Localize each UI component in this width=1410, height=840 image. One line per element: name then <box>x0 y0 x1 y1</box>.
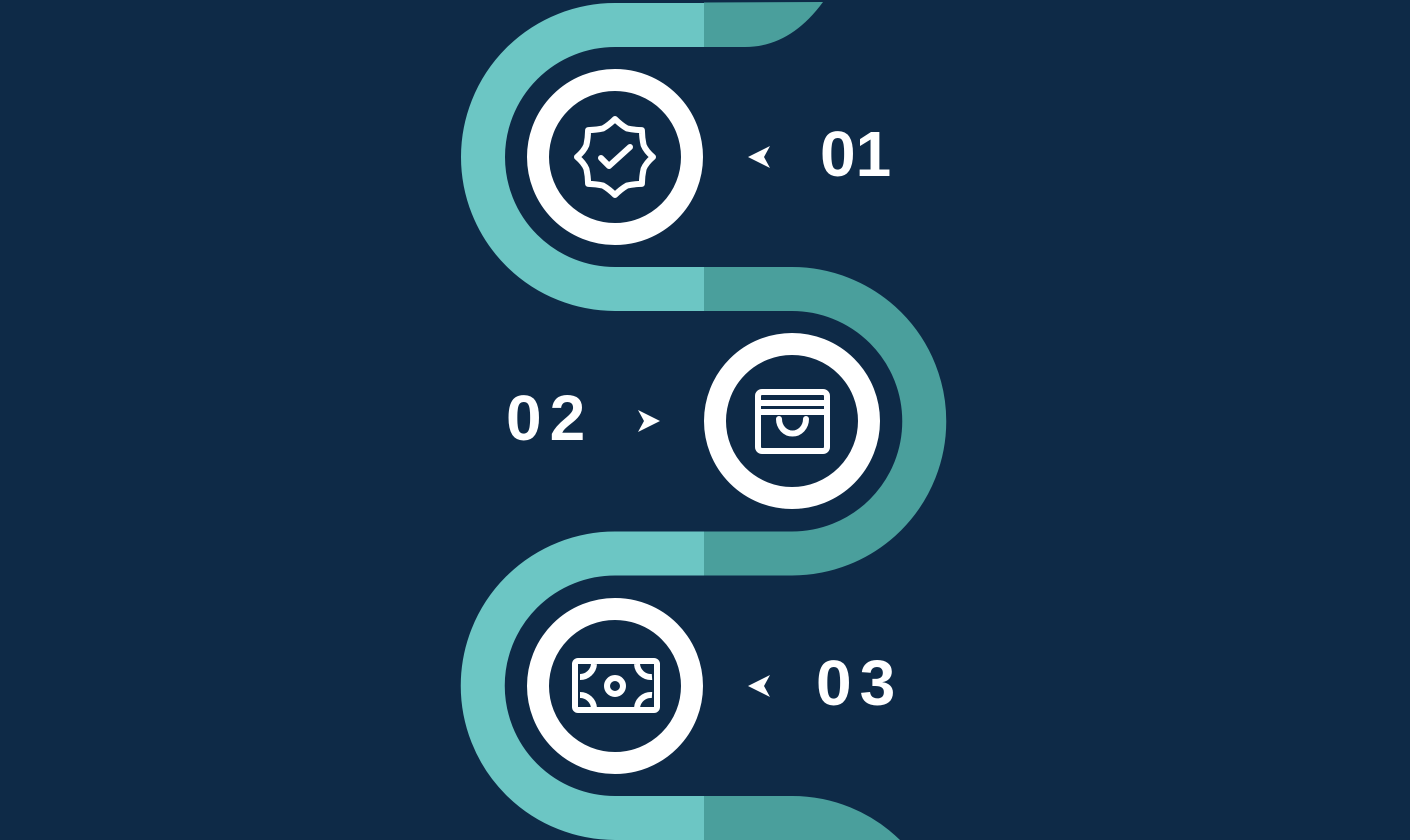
arrow 03 <box>748 675 770 697</box>
number 02: 02 <box>506 382 593 454</box>
step 02 <box>506 344 869 498</box>
icon ring 01 <box>538 80 692 234</box>
number 01: 01 <box>820 118 891 190</box>
icon: calendar/window <box>758 392 827 451</box>
number 03: 03 <box>816 647 903 719</box>
arrow 02 <box>638 410 660 432</box>
icon: verified badge <box>577 119 653 195</box>
step 01 <box>538 80 891 234</box>
icon ring 02 <box>715 344 869 498</box>
icon ring 03 <box>538 609 692 763</box>
arrow 01 <box>748 146 770 168</box>
S-curve path band <box>483 2 924 840</box>
icon: money bill <box>575 661 657 710</box>
step 03 <box>538 609 903 763</box>
